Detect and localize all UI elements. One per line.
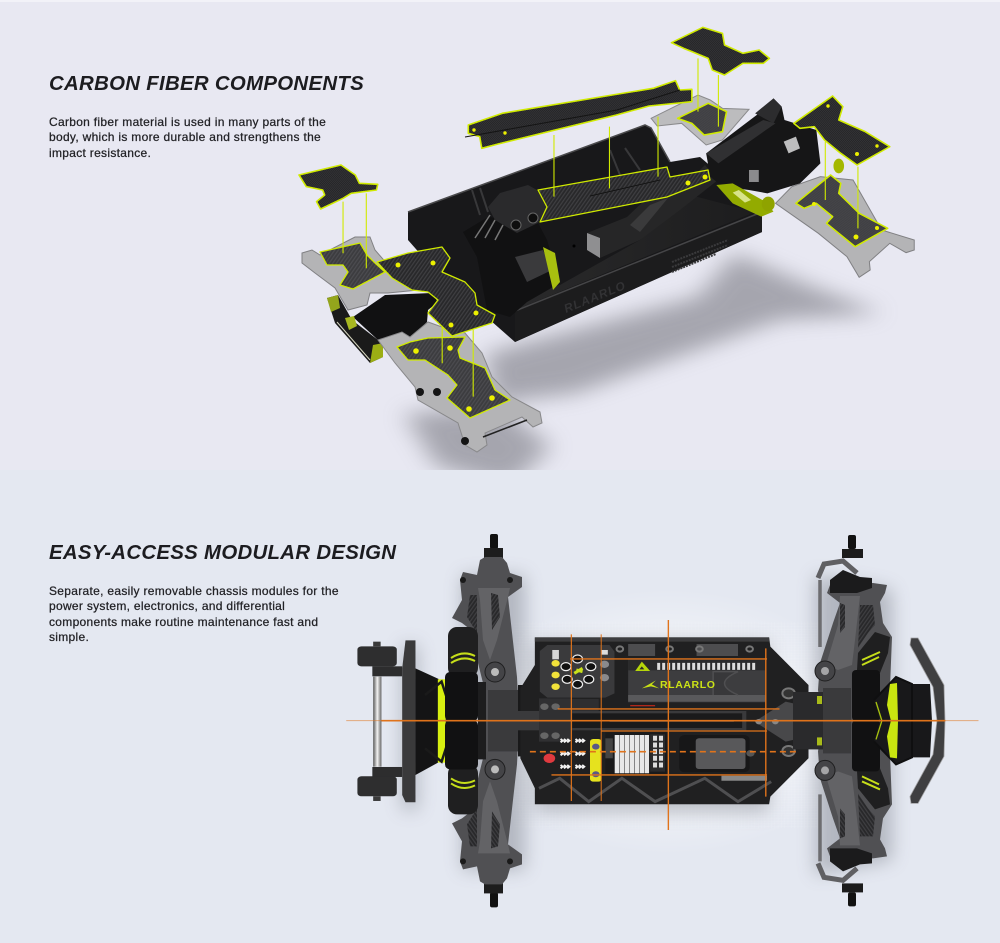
plate: long upper strips	[468, 81, 692, 148]
tub	[408, 125, 762, 342]
carbon windows	[467, 595, 477, 633]
heading: easy-access modular design: EASY-ACCESS MODULAR DESIGN	[49, 542, 396, 564]
text: modular design description: simple.	[49, 630, 89, 644]
plate: front top	[377, 247, 495, 336]
background: lower section	[0, 470, 1000, 943]
shock	[448, 627, 478, 677]
text: carbon fiber description: body, which is more durable and strengthens the	[49, 130, 321, 144]
text: modular design description: power system, electronics, and differential	[49, 599, 285, 613]
arm	[452, 557, 522, 721]
hinge post	[490, 534, 498, 549]
bumper plate	[402, 640, 415, 802]
ESC and capacitor module	[540, 645, 614, 711]
hub	[445, 672, 478, 721]
tires	[357, 646, 397, 666]
carbon windows	[858, 605, 875, 648]
front bumper	[327, 295, 383, 363]
battery logo text: RLAARLO	[660, 679, 716, 691]
arm	[818, 583, 892, 721]
blueprint grid glow	[469, 588, 867, 855]
text: carbon fiber description	[49, 115, 326, 160]
car: top view chassis	[346, 534, 978, 907]
text: carbon fiber description: impact resistance.	[49, 146, 151, 160]
side wall logo text: RLAARLO	[562, 278, 628, 316]
leader lines	[343, 58, 858, 397]
text: modular design description: components make routine maintenance fast and	[49, 615, 318, 629]
link rod	[818, 580, 822, 647]
background: top edge	[0, 0, 1000, 2]
rear bumper	[910, 638, 945, 721]
central spine	[498, 711, 746, 730]
front bulkhead and shock tower	[463, 185, 560, 317]
plate: right arm	[796, 175, 888, 247]
link arm	[818, 561, 857, 578]
screw dots	[396, 104, 879, 412]
heading: carbon fiber components: CARBON FIBER COMPONENTS	[49, 73, 364, 95]
strip divider lines	[465, 90, 680, 196]
axle	[373, 677, 381, 767]
plate: left floating	[299, 165, 378, 209]
rear arms	[651, 95, 914, 277]
inner block	[488, 690, 518, 721]
carbon plates: upper and rear	[299, 27, 890, 247]
plate: upper right arm	[678, 103, 727, 135]
center chassis tub	[498, 637, 808, 804]
shock	[857, 632, 890, 673]
soft shadows	[402, 575, 892, 875]
center brace	[587, 165, 718, 258]
plate: rear top floating	[671, 27, 769, 75]
front arm	[378, 322, 542, 452]
arm bolts	[416, 388, 469, 445]
front chassis floor	[353, 293, 438, 340]
receiver box	[679, 735, 767, 778]
plate: left arm	[320, 243, 385, 289]
text: modular design description: Separate, easily removable chassis modules for the	[49, 584, 339, 598]
text: carbon fiber description: Carbon fiber material is used in many parts of the	[49, 115, 326, 129]
black cap	[830, 570, 872, 593]
rear cage	[874, 677, 932, 721]
hub	[852, 670, 880, 721]
plate: front arm	[397, 337, 510, 418]
pivot ball	[485, 662, 505, 682]
plate: lower chassis strips	[538, 167, 710, 222]
left suspension	[445, 534, 544, 907]
rear bulkhead and gearbox	[706, 98, 844, 217]
yellow bar	[438, 679, 446, 763]
text: modular design description	[49, 584, 339, 644]
orange guide lines	[346, 620, 978, 830]
arm pivot rod	[483, 420, 527, 437]
ground shadow	[404, 253, 882, 487]
plate: right floating	[794, 96, 890, 165]
left rear arm	[302, 237, 418, 310]
motor and power switch	[544, 732, 667, 782]
right suspension	[793, 535, 945, 906]
front skid and bumper	[357, 640, 447, 802]
carbon plates: chassis and front	[320, 167, 710, 418]
pivot ball	[815, 661, 835, 681]
hinge post	[848, 535, 856, 549]
car: exploded chassis with carbon fiber plates	[299, 27, 914, 487]
battery	[628, 660, 766, 706]
